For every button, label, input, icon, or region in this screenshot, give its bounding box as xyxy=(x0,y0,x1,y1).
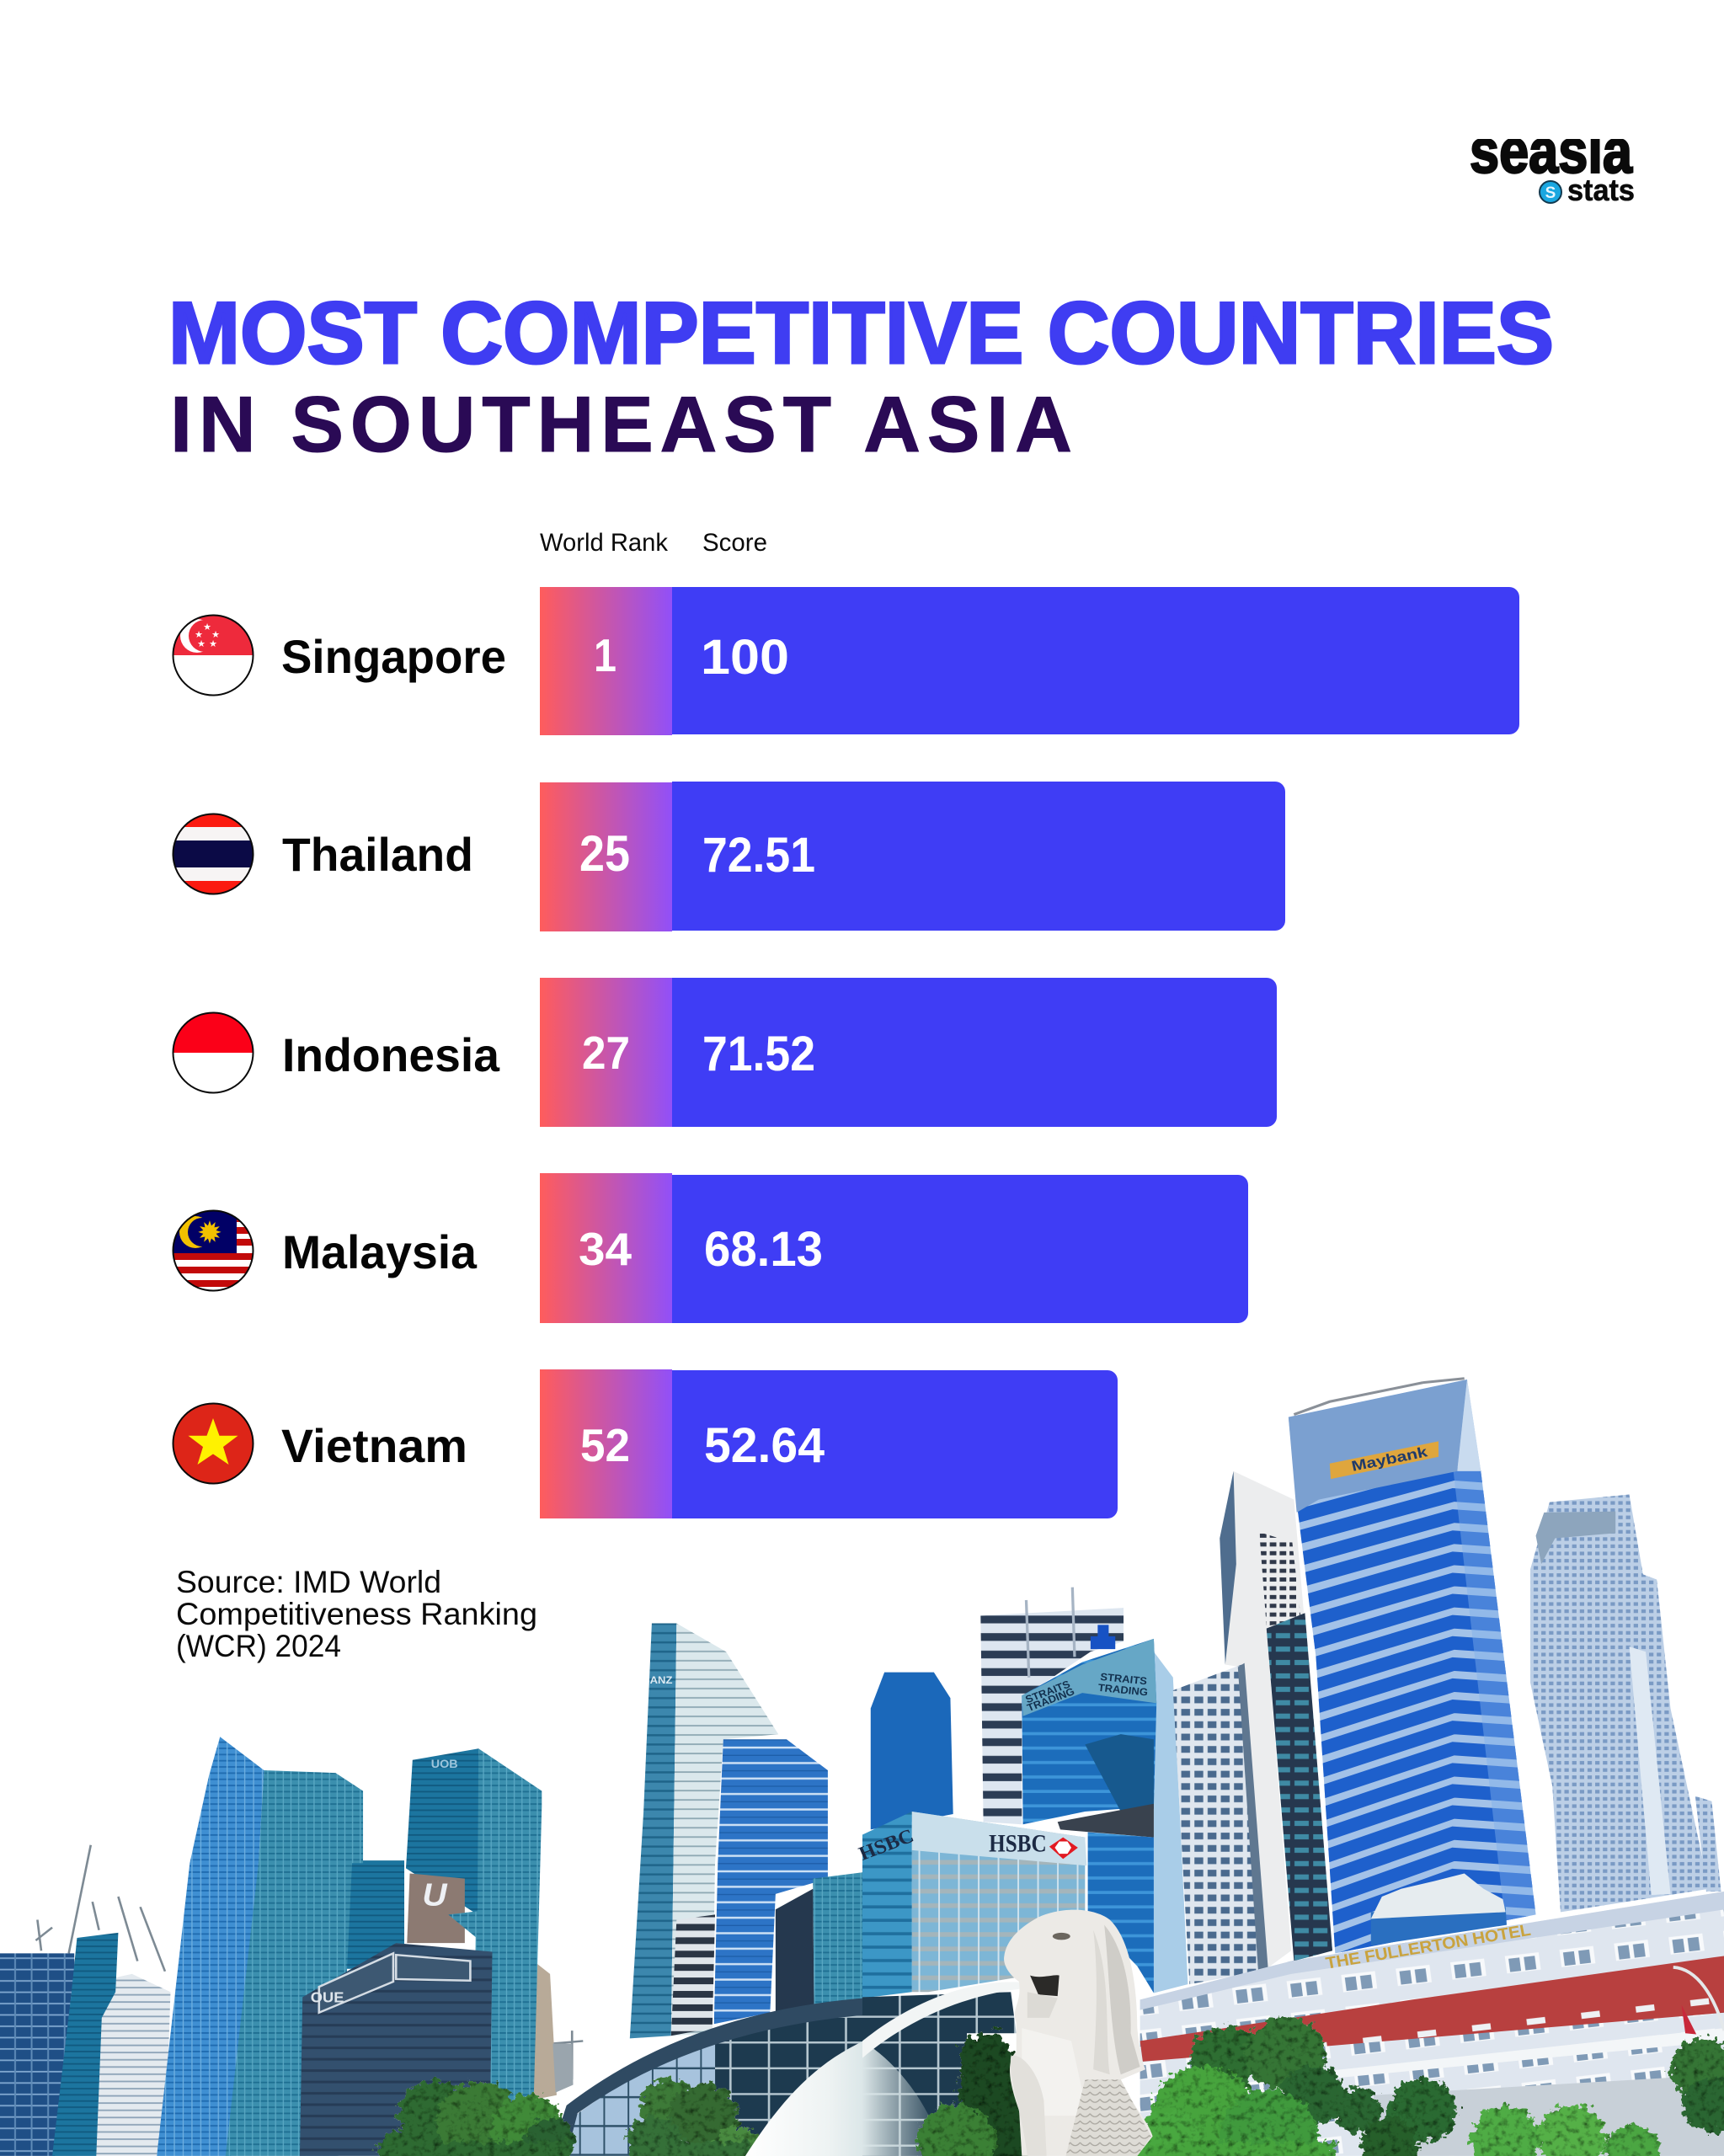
icon: stats globe xyxy=(1540,181,1561,203)
building: tan block with U logo: U xyxy=(422,1877,448,1913)
score bar: Vietnam: 52.64 xyxy=(704,1418,825,1473)
building: grey stepped tower xyxy=(1530,1494,1709,1912)
icon: stats globe: S xyxy=(1545,184,1556,202)
building: front white tower xyxy=(1173,1663,1268,1984)
building: HSBC xyxy=(856,1812,1086,1999)
source note: (WCR) 2024 xyxy=(176,1629,341,1663)
score bar: Singapore: 100 xyxy=(701,630,789,685)
header: world rank: World Rank xyxy=(540,529,669,557)
rank: Thailand: 25 xyxy=(579,825,630,882)
rank: Vietnam: 52 xyxy=(580,1419,630,1471)
label: Malaysia: Malaysia xyxy=(282,1225,478,1278)
rank: Vietnam xyxy=(540,1369,672,1518)
building: UOB tower: UOB xyxy=(431,1757,458,1770)
building: Fullerton Hotel xyxy=(1140,1892,1724,2156)
building: UOB tower xyxy=(406,1748,542,2105)
building: small grey tower xyxy=(531,1961,557,2100)
row: Malaysia xyxy=(173,1173,1248,1323)
header: score: Score xyxy=(702,529,767,557)
wordmark top mask xyxy=(1464,108,1641,139)
building: teal block xyxy=(813,1872,862,2008)
label: Vietnam: Vietnam xyxy=(281,1419,467,1472)
logo: seasia stats xyxy=(1464,108,1641,207)
title xyxy=(168,285,1554,468)
trees: left xyxy=(377,2079,759,2156)
building: Maybank tower xyxy=(1289,1379,1544,1977)
building: curved blue tower xyxy=(157,1737,363,2156)
building: small blue tower xyxy=(871,1673,953,1829)
building: blue rise xyxy=(714,1739,828,2024)
score bar: Indonesia: 71.52 xyxy=(702,1027,815,1081)
trees xyxy=(916,2017,1724,2156)
row: Vietnam xyxy=(173,1369,1118,1518)
flag: Singapore xyxy=(173,615,254,696)
flag: Vietnam xyxy=(173,1403,253,1484)
lamp post and flag xyxy=(1673,1967,1724,2034)
rank: Malaysia: 34 xyxy=(579,1223,632,1275)
cranes xyxy=(35,1845,583,2079)
building: far-right slim xyxy=(1695,1796,1721,1892)
title line 1: MOST COMPETITIVE COUNTRIES xyxy=(168,285,1554,382)
building: Straits Trading xyxy=(1022,1639,1156,1824)
building: dark block xyxy=(776,1889,814,2015)
source note: Source: IMD World xyxy=(176,1565,441,1599)
building: dark OUE block xyxy=(300,1943,493,2156)
skyline photo: right part xyxy=(856,1379,1724,2156)
rank: Singapore: 1 xyxy=(594,629,616,681)
flag: Singapore: ★ xyxy=(197,639,205,649)
row: Indonesia xyxy=(173,978,1277,1127)
score bar: Vietnam xyxy=(672,1370,1118,1518)
source note: Competitiveness Ranking xyxy=(176,1597,537,1631)
score bar: Thailand xyxy=(672,782,1285,931)
building: Maybank tower: Maybank xyxy=(1350,1444,1429,1475)
rank: Indonesia xyxy=(540,978,672,1127)
building: Straits Trading: TRADING xyxy=(1026,1685,1076,1714)
score bar: Malaysia xyxy=(672,1175,1248,1323)
bar chart xyxy=(173,587,1519,1518)
building: striped white tower xyxy=(980,1588,1124,1824)
rank: Malaysia xyxy=(540,1173,672,1323)
flag: Singapore: ★ xyxy=(211,630,220,640)
building: Fullerton Hotel: THE FULLERTON HOTEL xyxy=(1324,1921,1532,1972)
flag: Singapore: ★ xyxy=(195,630,203,640)
building: Straits Trading: STRAITS xyxy=(1100,1671,1148,1687)
rank: Singapore xyxy=(540,587,672,735)
building: HSBC: HSBC xyxy=(856,1825,917,1865)
building: curved low arcade xyxy=(550,1999,862,2156)
fountain mist xyxy=(745,2041,863,2156)
building: Straits Trading: TRADING xyxy=(1097,1682,1149,1698)
rank: Thailand xyxy=(540,782,672,931)
building: distant low block xyxy=(552,2043,574,2093)
skyline photo: left part xyxy=(0,1624,863,2156)
building: white tall tower xyxy=(1220,1471,1305,1969)
penthouse xyxy=(1371,1873,1507,1945)
building: under-Straits podium xyxy=(1058,1804,1154,1993)
title line 2: IN SOUTHEAST ASIA xyxy=(170,380,1072,468)
row: Singapore xyxy=(173,587,1519,735)
rank: Indonesia: 27 xyxy=(582,1027,630,1079)
building: teal right block xyxy=(448,1907,534,2105)
building: teal mid block xyxy=(344,1860,404,1969)
construction tower shadow xyxy=(52,1933,118,2156)
flag: Singapore: ★ xyxy=(203,622,211,632)
building: construction tower xyxy=(55,1974,170,2156)
building: dark tower xyxy=(1267,1613,1332,1961)
score bar: Malaysia: 68.13 xyxy=(704,1222,823,1277)
flag: Indonesia xyxy=(173,1012,254,1093)
column headers xyxy=(540,529,767,557)
score bar: Indonesia xyxy=(672,978,1277,1127)
label: Singapore: Singapore xyxy=(281,630,506,683)
flag: Malaysia xyxy=(173,1210,254,1291)
building: HSBC: HSBC xyxy=(989,1830,1047,1858)
row: Thailand xyxy=(173,782,1285,931)
building: far-left block xyxy=(0,1953,77,2156)
logo subtext: stats xyxy=(1567,173,1635,207)
label: Thailand: Thailand xyxy=(282,828,473,881)
score bar: Singapore xyxy=(672,587,1519,734)
building: ANZ tower xyxy=(630,1624,778,2038)
fountain water xyxy=(862,1982,1030,2156)
building: Straits Trading: STRAITS xyxy=(1024,1678,1072,1705)
source note xyxy=(176,1565,537,1663)
building: glass side wing xyxy=(1154,1652,1188,1993)
score bar: Thailand: 72.51 xyxy=(702,828,815,883)
Merlion statue xyxy=(1004,1910,1153,2156)
flag: Malaysia: ✹ xyxy=(197,1215,222,1250)
flag: Thailand xyxy=(173,814,254,894)
building: tan block with U logo xyxy=(407,1873,465,1943)
logo wordmark: seasia xyxy=(1470,116,1633,186)
label: Indonesia: Indonesia xyxy=(282,1028,500,1081)
building: striped low tower xyxy=(671,1914,715,2036)
building: ANZ tower: ANZ xyxy=(650,1675,673,1686)
building: dark OUE block: OUE xyxy=(311,1989,344,2005)
flag: Singapore: ★ xyxy=(209,639,217,649)
